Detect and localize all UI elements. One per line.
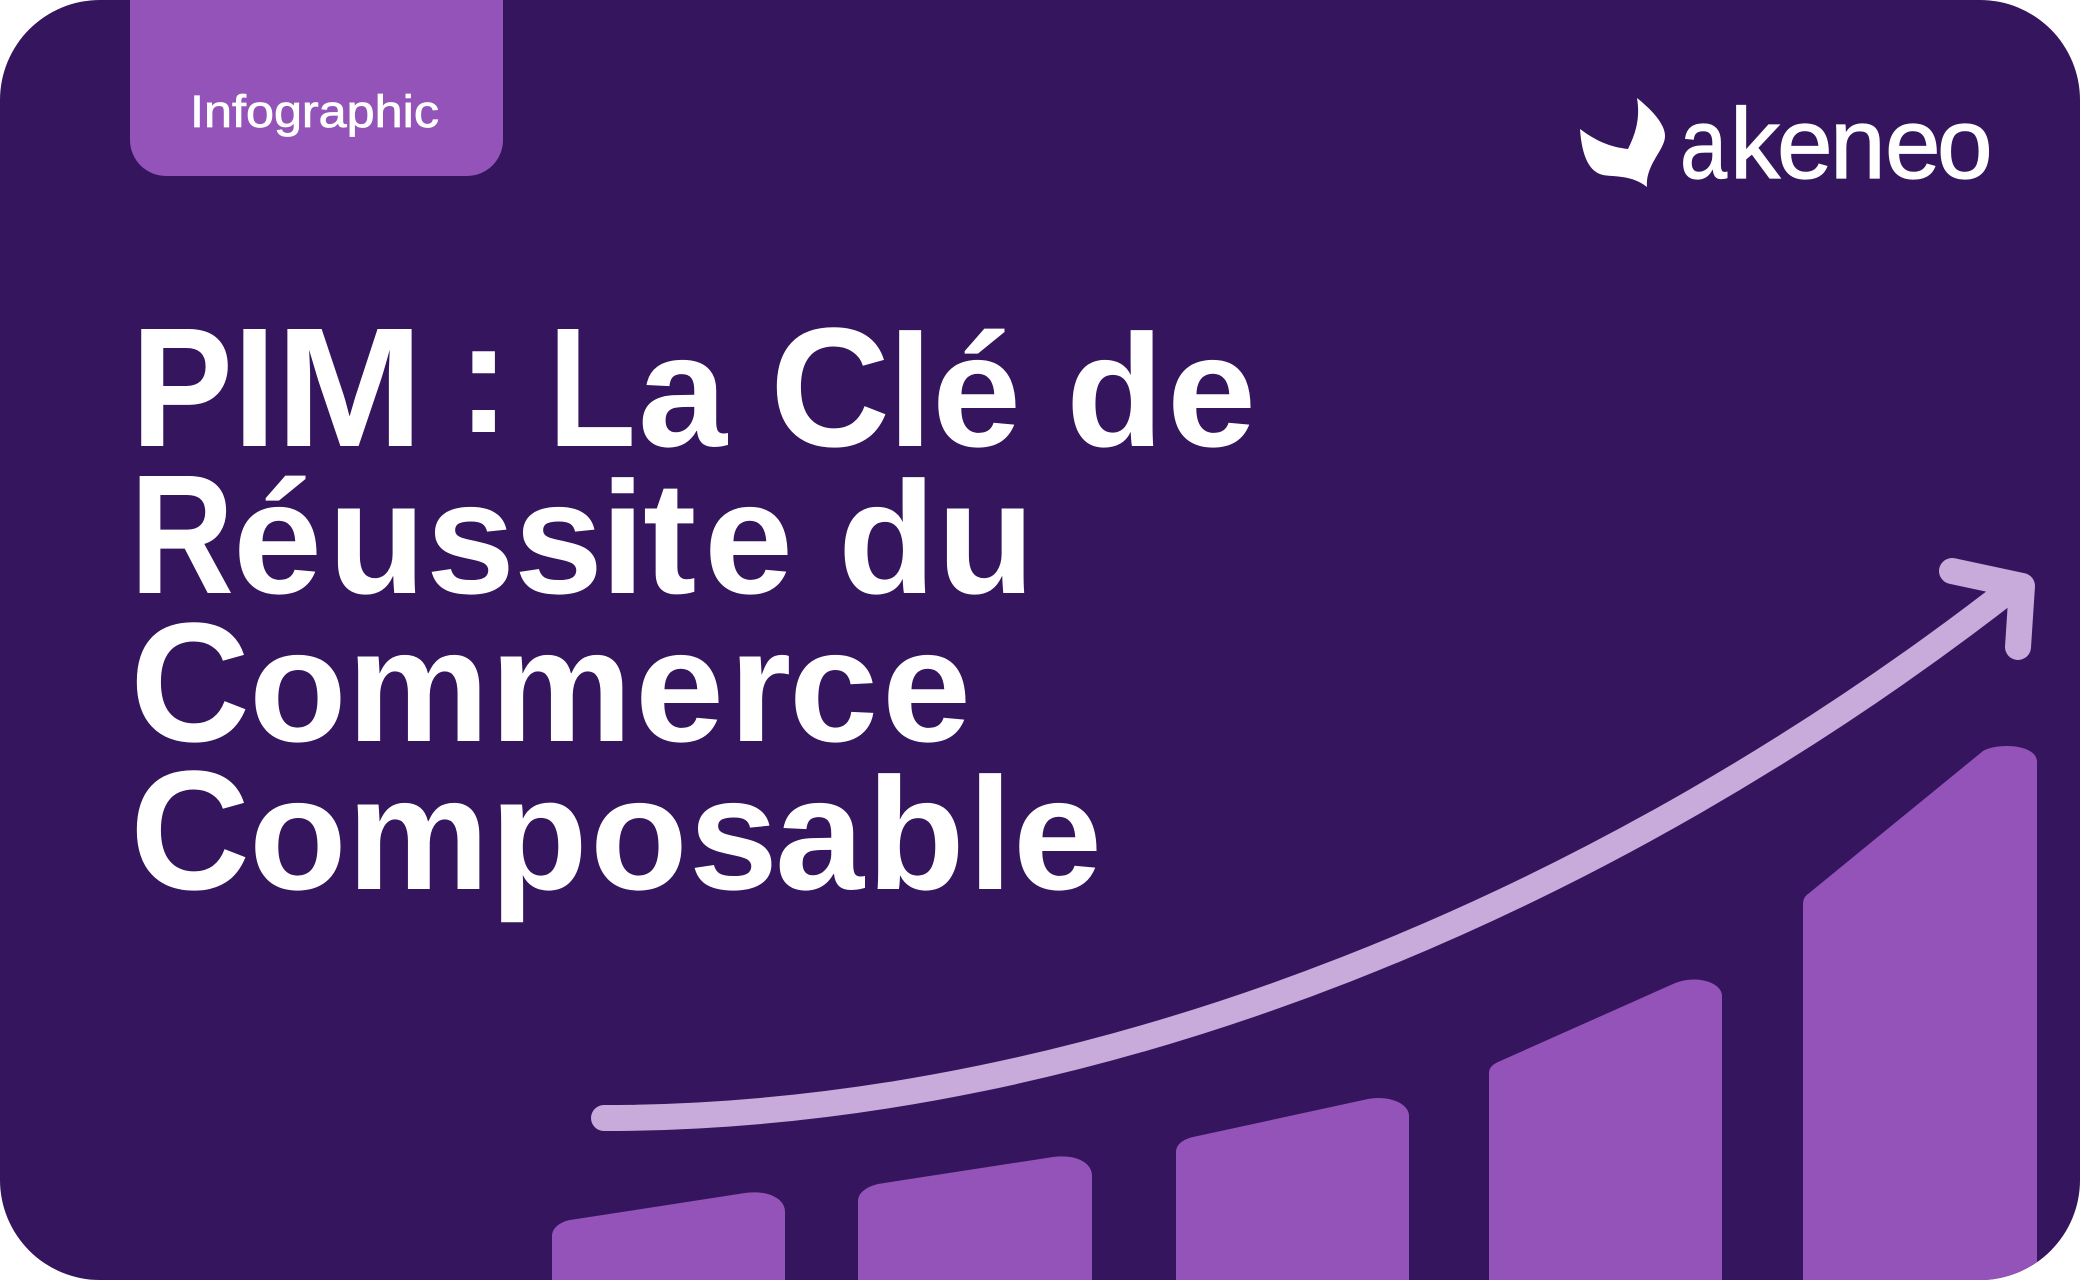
arrow shaft xyxy=(604,588,2012,1118)
bar 1 xyxy=(552,1192,785,1280)
title: C xyxy=(130,588,250,778)
title: éussite xyxy=(233,448,793,627)
logo wordmark: a xyxy=(1680,88,1727,200)
bar 4 xyxy=(1489,980,1722,1280)
icon: akeneo wing xyxy=(1580,98,1665,187)
title: R xyxy=(130,440,234,630)
bar 5 xyxy=(1803,746,2037,1280)
title: lé xyxy=(888,301,1021,480)
logo wordmark: keneo xyxy=(1730,88,1993,200)
bar chart xyxy=(552,746,2037,1280)
tab: infographic label xyxy=(130,0,503,176)
title: du xyxy=(838,448,1035,627)
title: I xyxy=(233,293,276,483)
logo: akeneo xyxy=(1580,88,1993,200)
title: omposable xyxy=(249,744,1102,923)
title: C xyxy=(770,293,890,483)
title: : xyxy=(457,287,510,466)
title xyxy=(130,287,1256,926)
title: a xyxy=(638,301,728,480)
tab: infographic label: Infographic xyxy=(190,86,439,137)
title: ommerce xyxy=(249,596,971,775)
title: C xyxy=(130,736,250,926)
title: de xyxy=(1066,301,1256,480)
bar 3 xyxy=(1176,1098,1409,1280)
title: L xyxy=(548,293,636,483)
arrow head xyxy=(1952,571,2022,647)
title: P xyxy=(131,293,233,483)
growth arrow xyxy=(604,571,2022,1118)
bar 2 xyxy=(858,1156,1092,1280)
title: M xyxy=(276,293,424,483)
